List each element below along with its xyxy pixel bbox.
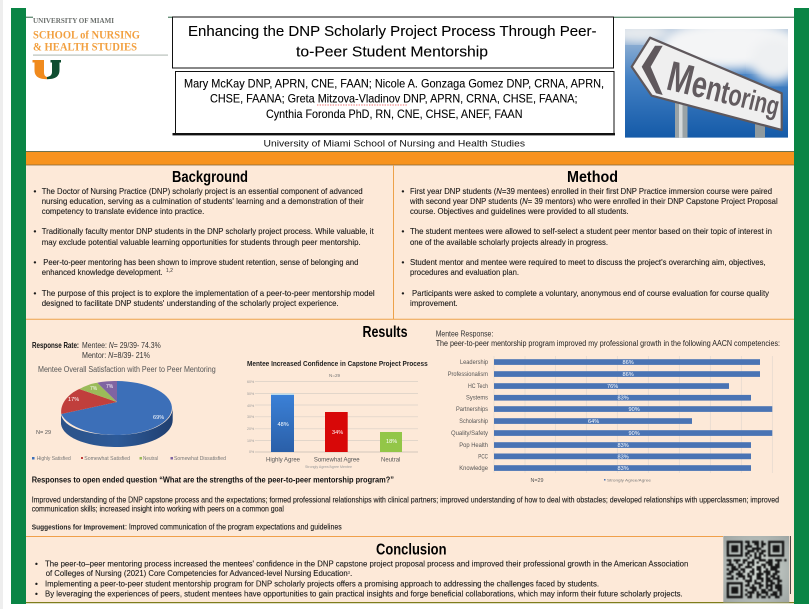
bar chart: AACN competencies: PCC [478, 454, 489, 460]
text block: background bullets: Traditionally faculty mentor DNP students in the DNP scholarly project process. While valuable, it [42, 227, 374, 236]
pie legend: Somewhat Dissatisfied [174, 456, 226, 462]
bar chart: mentee increased confidence: 34% [332, 430, 343, 436]
poster body background [26, 165, 794, 603]
logo: University of Miami School of Nursing and Health Studies: SCHOOL of NURSING [33, 28, 140, 42]
text block: background bullets: The purpose of this project is to explore the implementation of a peer-to-peer mentorship model [42, 289, 375, 298]
pie chart: mentee overall satisfaction: 17% [68, 397, 79, 403]
right green border [794, 8, 809, 604]
bar chart: mentee increased confidence: Highly Agree [266, 458, 301, 464]
text block: background bullets: • [34, 258, 36, 267]
bar chart: AACN competencies: Scholarship [459, 419, 489, 425]
bar chart: mentee increased confidence: 30% [247, 415, 255, 419]
image: Mentoring road sign: Mentoring [663, 52, 786, 125]
bar chart: mentee increased confidence: 18% [386, 439, 397, 445]
bar chart: AACN competencies: Knowledge [459, 466, 489, 472]
bar chart: AACN competencies: Leadership [460, 360, 489, 366]
text block: method bullets: • [402, 258, 404, 267]
bar chart: AACN competencies: 86% [622, 372, 634, 378]
bar chart: AACN competencies: 83% [618, 396, 629, 402]
text block: open-ended responses: : Improved communication of the program expectations and guidelines [125, 522, 342, 532]
pie chart: mentee overall satisfaction: 7% [90, 386, 98, 392]
bar chart: AACN competencies: Strongly Agree/Agree [607, 478, 652, 482]
authors box: Cynthia Foronda PhD, RN, CNE, CHSE, ANEF, FAAN [266, 108, 522, 121]
text block: method bullets: • [402, 187, 404, 196]
text block: conclusion bullets: of Colleges of Nursing (2021) Core Competencies for Advanced-level Nursing Education [46, 569, 348, 578]
text block: method bullets: • [402, 227, 404, 236]
bar chart: mentee increased confidence: Mentee Increased Confidence in Capstone Project Process [247, 359, 428, 368]
pie chart: mentee overall satisfaction: 69% [153, 415, 164, 421]
text block: background bullets: The Doctor of Nursing Practice (DNP) scholarly project is an essential component of advanced [42, 187, 363, 196]
text block: background bullets: may exclude potential valuable learning opportunities for students through peer mentorship. [42, 238, 361, 247]
bar chart: AACN competencies: HC Tech [468, 384, 488, 390]
bar chart: AACN competencies: Quality/Safety [451, 431, 488, 437]
text block: conclusion bullets: By leveraging the experiences of peers, student mentees have opportunities to gain practical insights and forge beneficial collaborations, which may inform their future scholarly projects. [45, 590, 683, 599]
text block: method bullets: improvement. [410, 299, 458, 308]
QR code [723, 536, 790, 602]
bar chart: mentee increased confidence: 50% [247, 392, 255, 396]
bar chart: mentee increased confidence: 40% [247, 404, 255, 408]
heading: Method: Method [567, 169, 618, 186]
text block: conclusion bullets: The peer-to–peer mentoring process increased the mentees' confidence in the DNP capstone project proposal process and improved their professional growth in the American Association [45, 560, 689, 569]
bar chart: mentee increased confidence: 60% [247, 380, 255, 384]
text block: open-ended responses: communication skills; increased insight into working with peers on a common goal [32, 504, 284, 514]
text block: background bullets: nursing education, serving as a culmination of students' learning and a demonstration of their [42, 197, 364, 206]
bar chart: AACN competencies: 83% [618, 443, 629, 449]
text block: conclusion bullets: • [35, 560, 38, 569]
authors box: Mary McKay DNP, APRN, CNE, FAAN; Nicole A. Gonzaga Gomez DNP, CRNA, APRN, [184, 78, 604, 90]
bar chart: mentee increased confidence: Somewhat Agree [314, 458, 360, 464]
text block: conclusion bullets: • [35, 580, 38, 589]
bar chart: mentee increased confidence: 0% [249, 450, 255, 454]
image: Mentoring road sign [625, 29, 788, 138]
text block: background bullets: Peer-to-peer mentoring has been shown to improve student retention, sense of belonging and [43, 258, 359, 267]
text block: method bullets: procedures and evaluation plan. [410, 268, 519, 277]
logo: University of Miami School of Nursing and Health Studies [32, 17, 168, 79]
affiliation: University of Miami School of Nursing and Health Studies [264, 138, 525, 148]
icon: U logo orange half [32, 60, 47, 79]
title box: Enhancing the DNP Scholarly Project Process Through Peer- [188, 23, 597, 40]
logo: University of Miami School of Nursing and Health Studies: & HEALTH STUDIES [33, 40, 137, 54]
text block: open-ended responses [32, 476, 779, 532]
icon: U logo green half [47, 60, 61, 79]
response rate [32, 341, 161, 360]
response rate: Mentee: N= 29/39- 74.3% [82, 341, 161, 350]
text block: conclusion bullets [35, 560, 689, 599]
bar chart: AACN competencies: Systems [466, 396, 488, 402]
bar chart: mentee increased confidence: Neutral [381, 458, 400, 464]
bar chart: AACN competencies [448, 356, 772, 484]
response rate: Mentor: N=8/39- 21% [82, 351, 150, 360]
bar chart: mentee increased confidence [247, 359, 428, 469]
chart heading: mentee response: The peer-to-peer mentorship program improved my professional growth in the following AACN competencies: [436, 339, 780, 348]
heading: Background: Background [172, 169, 248, 186]
text block: background bullets: designed to facilitate DNP students' understanding of the scholarly project experience. [42, 299, 339, 308]
title box: to-Peer Student Mentorship [296, 44, 488, 60]
text block: open-ended responses: Responses to open ended question “What are the strengths of the peer-to-peer mentorship program?” [32, 476, 394, 484]
text block: background bullets: • [34, 227, 36, 236]
text block: method bullets: • [402, 289, 404, 298]
bar chart: AACN competencies: Pop Health [459, 443, 488, 449]
text block: background bullets: • [34, 289, 36, 298]
panel: conclusion [26, 536, 794, 603]
bar chart: AACN competencies: 90% [628, 407, 640, 413]
orange banner [26, 151, 794, 165]
pie chart: mentee overall satisfaction: Mentee Overall Satisfaction with Peer to Peer Mentoring [38, 365, 216, 374]
chart heading: mentee response [436, 330, 780, 348]
text block: method bullets: with second year DNP students (N= 39 mentors) who were enrolled in their DNP Capstone Project Proposal [409, 197, 778, 206]
bar chart: mentee increased confidence: Strongly Agree/Agree Mentee [305, 465, 352, 469]
text block: conclusion bullets: 3 [348, 570, 350, 575]
bar chart: mentee increased confidence: N=29 [329, 373, 341, 378]
text block: method bullets: The student mentees were allowed to self-select a student peer mentor based on their topic of interest in [410, 227, 772, 236]
authors box [172, 72, 615, 135]
bar chart: AACN competencies: Professionalism [448, 372, 488, 378]
text block: background bullets: enhanced knowledge development. [42, 268, 163, 277]
panel: method [402, 169, 778, 308]
bar chart: AACN competencies: 64% [588, 419, 599, 425]
bar chart: AACN competencies: 83% [618, 466, 629, 472]
bar chart: AACN competencies: 86% [622, 360, 634, 366]
title box [172, 17, 614, 68]
text block: background bullets [34, 187, 375, 308]
bar chart: AACN competencies: 83% [618, 454, 629, 460]
text block: method bullets: course. Objectives and guidelines were provided to all students. [410, 207, 629, 216]
text block: method bullets [402, 187, 778, 308]
pie legend: Neutral [143, 456, 158, 462]
left green border [11, 8, 26, 604]
text block: background bullets: competency to translate evidence into practice. [42, 207, 204, 216]
heading: Results: Results [362, 324, 408, 341]
response rate: Response Rate: [32, 341, 79, 350]
pie legend: Highly Satisfied [37, 456, 71, 462]
text block: conclusion bullets: Implementing a peer-to-peer student mentorship program for DNP scholarly projects offers a promising approach to addressing the challenges faced by students. [45, 580, 599, 589]
chart heading: mentee response: Mentee Response: [436, 330, 493, 339]
logo: University of Miami School of Nursing and Health Studies: UNIVERSITY OF MIAMI [33, 17, 114, 25]
text block: method bullets: one of the available scholarly projects already in progress. [410, 238, 608, 247]
pie chart: mentee overall satisfaction: 7% [106, 384, 114, 390]
pie legend: Somewhat Satisfied [84, 456, 130, 462]
bar chart: mentee increased confidence: 48% [278, 422, 289, 428]
pie chart: mentee overall satisfaction [32, 365, 226, 462]
bar chart: AACN competencies: 90% [628, 431, 640, 437]
bar chart: AACN competencies: 76% [607, 384, 618, 390]
text block: method bullets: First year DNP students (N=39 mentees) enrolled in their first DNP Practice immersion course were paired [410, 187, 772, 196]
text block: background bullets: • [34, 187, 36, 196]
text block: open-ended responses: Suggestions for Improvement [32, 522, 125, 532]
text block: conclusion bullets: . [350, 569, 352, 578]
bar chart: mentee increased confidence: 10% [247, 439, 255, 443]
bar chart: mentee increased confidence: 20% [247, 427, 255, 431]
text block: method bullets: Student mentor and mentee were required to meet to discuss the project's overarching aim, objectives, [410, 258, 766, 267]
bar chart: AACN competencies: Partnerships [456, 407, 488, 413]
bar chart: AACN competencies: N=29 [530, 478, 544, 484]
text block: method bullets: Participants were asked to complete a voluntary, anonymous end of course evaluation for course quality [412, 289, 770, 298]
heading: Conclusion: Conclusion [376, 542, 446, 558]
panel: background [34, 169, 375, 308]
authors box: CHSE, FAANA; Greta Mitzova-Vladinov DNP, APRN, CRNA, CHSE, FAANA; [210, 92, 578, 106]
text block: conclusion bullets: • [35, 590, 38, 599]
pie chart: mentee overall satisfaction: N= 29 [36, 430, 51, 436]
pie legend [32, 456, 226, 462]
text block: background bullets: 1,2 [166, 268, 173, 274]
